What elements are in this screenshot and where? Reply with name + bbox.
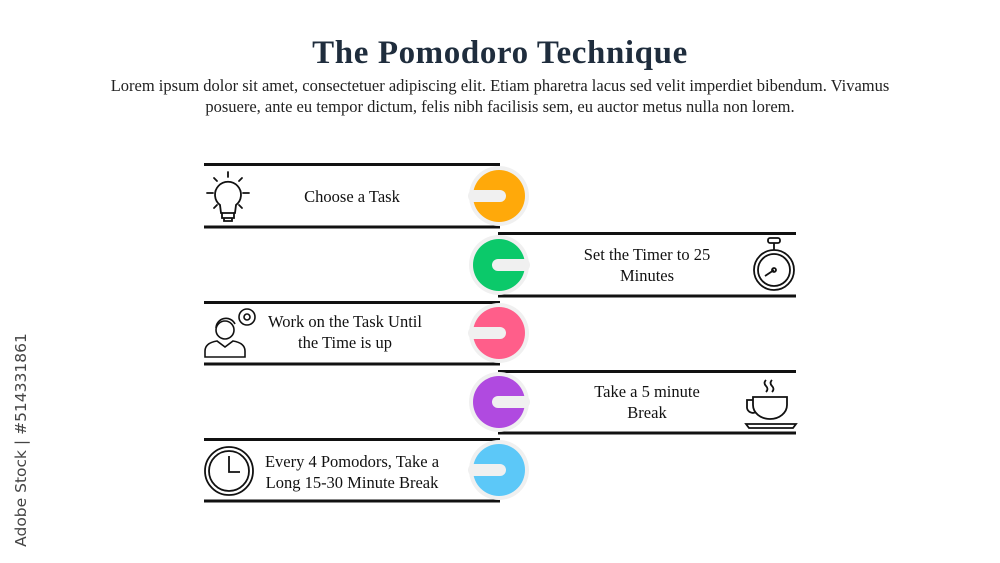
row 1: choose a task xyxy=(204,164,500,227)
row 5: long break: Every 4 Pomodors, Take a xyxy=(265,452,440,471)
row 3: work on task: Work on the Task Until xyxy=(268,312,422,331)
row 2: set timer xyxy=(498,234,796,296)
row 4: short break: Break xyxy=(627,403,667,422)
watermark id: Adobe Stock | #514331861 xyxy=(12,333,30,547)
row 2: set timer: Minutes xyxy=(620,266,674,285)
icon: worker with gear xyxy=(205,309,255,357)
row 3: work on task: the Time is up xyxy=(298,333,392,352)
row 2: set timer: Set the Timer to 25 xyxy=(584,245,710,264)
icon: clock xyxy=(205,447,253,495)
icon: coffee cup xyxy=(746,380,796,428)
row 1: choose a task: Choose a Task xyxy=(304,187,401,206)
row 3: work on task xyxy=(204,302,500,364)
row 4: short break: Take a 5 minute xyxy=(594,382,700,401)
row 5: long break xyxy=(204,440,500,501)
row 4: short break xyxy=(498,372,796,433)
icon: light bulb xyxy=(207,172,249,221)
title: The Pomodoro Technique xyxy=(312,35,688,71)
circles column xyxy=(468,166,530,500)
row 5: long break: Long 15-30 Minute Break xyxy=(266,473,439,492)
subtitle text xyxy=(111,76,889,116)
subtitle text: Lorem ipsum dolor sit amet, consectetuer adipiscing elit. Etiam pharetra lacus sed velit imperdiet bibendum. Vivamus xyxy=(111,76,889,95)
subtitle text: posuere, ante eu tempor dictum, felis nibh facilisis sem, eu auctor metus nulla non lorem. xyxy=(205,97,795,116)
icon: stopwatch xyxy=(754,238,794,290)
